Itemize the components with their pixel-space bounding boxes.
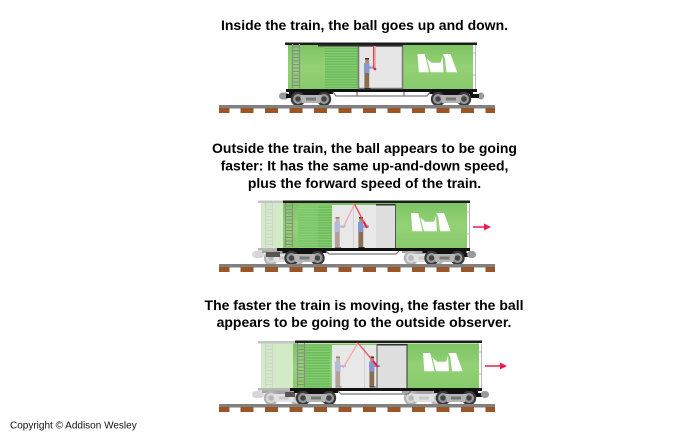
wheels and couplers bbox=[266, 249, 476, 265]
heading: faster train: appears to be going to the outside observer. bbox=[217, 314, 511, 330]
arrow bbox=[485, 362, 507, 370]
ghost person bbox=[335, 356, 346, 388]
heading: outside the train bbox=[212, 140, 517, 191]
copyright: Copyright © Addison Wesley bbox=[10, 420, 137, 432]
ghost train bbox=[252, 341, 446, 405]
heading: outside the train: Outside the train, the ball appears to be going bbox=[212, 140, 517, 156]
heading: faster train: The faster the train is moving, the faster the ball bbox=[205, 297, 523, 313]
couplers and wheel trucks bbox=[279, 90, 484, 106]
boxcar body bbox=[285, 42, 477, 96]
ghost person bbox=[334, 217, 346, 248]
ball path bbox=[343, 343, 378, 368]
boxcar body bbox=[290, 340, 482, 394]
heading: faster train bbox=[205, 297, 523, 330]
track 3 bbox=[219, 404, 495, 412]
person and ball path bbox=[364, 46, 376, 89]
ghost train bbox=[252, 200, 446, 265]
track 1 bbox=[219, 105, 495, 113]
track 2 bbox=[219, 264, 495, 272]
ball path bbox=[343, 204, 367, 228]
arrow bbox=[473, 224, 491, 230]
train 2: moving boxcar with ghost bbox=[252, 200, 491, 265]
train 3: faster boxcar with ghost bbox=[252, 340, 507, 405]
wheels and couplers bbox=[285, 389, 489, 405]
train 1: boxcar with ball going up and down bbox=[279, 42, 484, 106]
heading: outside the train: faster: It has the same up-and-down speed, bbox=[221, 158, 508, 174]
person bbox=[358, 217, 369, 248]
person bbox=[369, 356, 380, 388]
boxcar body bbox=[277, 200, 470, 254]
heading: outside the train: plus the forward speed of the train. bbox=[248, 175, 481, 191]
heading: inside the train: Inside the train, the ball goes up and down. bbox=[221, 17, 508, 33]
